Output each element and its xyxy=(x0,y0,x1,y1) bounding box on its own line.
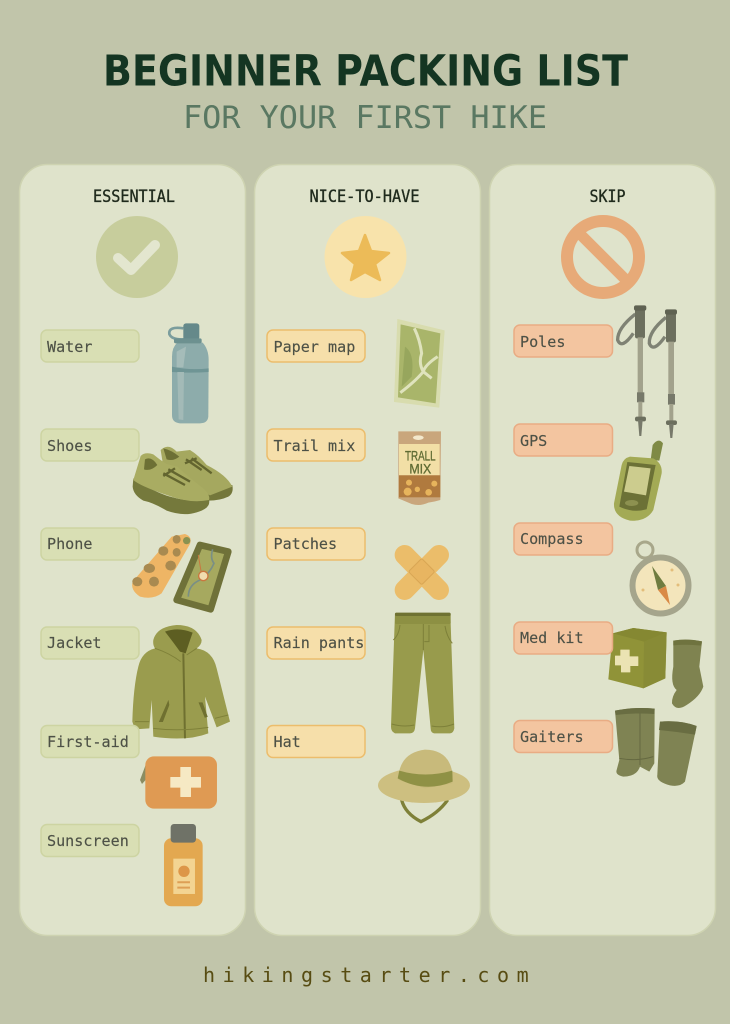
label: GPS: GPS xyxy=(520,432,547,450)
label: shoes: Shoes xyxy=(47,437,92,455)
label: first-aid: First-aid xyxy=(47,733,129,751)
label: jacket: Jacket xyxy=(47,634,102,652)
label: patches: Patches xyxy=(274,535,337,553)
panel: essential xyxy=(20,164,246,936)
icon: trekking poles xyxy=(618,305,677,438)
icon: prohibited sign xyxy=(567,221,639,293)
icon: jacket xyxy=(132,625,230,739)
icon: gaiters xyxy=(615,708,697,786)
icon: trail mix bag xyxy=(398,431,441,505)
icon: bandage patches xyxy=(405,555,439,590)
label: paper map xyxy=(267,330,365,362)
label: phone: Phone xyxy=(47,535,92,553)
label: rain pants: Rain pants xyxy=(274,634,364,652)
panel: skip xyxy=(490,164,716,936)
title: BEGINNER PACKING LIST xyxy=(103,46,629,96)
subtitle: FOR YOUR FIRST HIKE xyxy=(183,100,547,136)
icon: rain pants xyxy=(391,613,454,733)
label: GPS xyxy=(514,424,612,456)
label: med kit: Med kit xyxy=(520,629,584,647)
heading: skip: SKIP xyxy=(590,187,626,206)
label: trail mix xyxy=(267,429,365,461)
label: trail mix: Trail mix xyxy=(274,437,355,455)
icon: GPS device xyxy=(614,441,663,521)
label: compass xyxy=(514,523,612,555)
icon: trail mix bag: TRALL xyxy=(405,449,436,464)
label: sunscreen xyxy=(41,824,139,856)
icon: trail mix bag: MIX xyxy=(409,462,431,477)
icon: bar wrapper and phone map xyxy=(132,534,228,609)
icon: compass xyxy=(632,542,688,614)
icon: sunscreen bottle xyxy=(164,824,203,906)
label: patches xyxy=(267,528,365,560)
icon: star xyxy=(324,216,406,298)
footer website: hikingstarter.com xyxy=(203,963,536,987)
label: rain pants xyxy=(267,627,365,659)
label: gaiters xyxy=(514,720,612,752)
label: water: Water xyxy=(47,338,92,356)
label: hat xyxy=(267,726,365,758)
label: med kit xyxy=(514,622,612,654)
icon: first-aid pouch xyxy=(140,756,217,809)
label: jacket xyxy=(41,627,139,659)
icon: check mark xyxy=(96,216,178,298)
label: shoes xyxy=(41,429,139,461)
heading: essential: ESSENTIAL xyxy=(93,187,175,206)
label: water xyxy=(41,330,139,362)
label: sunscreen: Sunscreen xyxy=(47,832,129,850)
label: phone xyxy=(41,528,139,560)
label: gaiters: Gaiters xyxy=(520,728,584,746)
label: compass: Compass xyxy=(520,530,584,548)
icon: shoes xyxy=(133,447,233,514)
icon: sock xyxy=(672,640,703,708)
icon: water bottle xyxy=(169,323,209,423)
icon: medical box xyxy=(608,628,667,688)
label: poles: Poles xyxy=(520,333,565,351)
label: poles xyxy=(514,325,612,357)
label: paper map: Paper map xyxy=(274,338,355,356)
label: hat: Hat xyxy=(274,733,301,751)
icon: hat xyxy=(378,750,470,822)
label: first-aid xyxy=(41,726,139,758)
heading: nice-to-have: NICE-TO-HAVE xyxy=(310,187,420,206)
panel: nice-to-have xyxy=(254,164,480,936)
icon: paper map xyxy=(394,319,444,407)
